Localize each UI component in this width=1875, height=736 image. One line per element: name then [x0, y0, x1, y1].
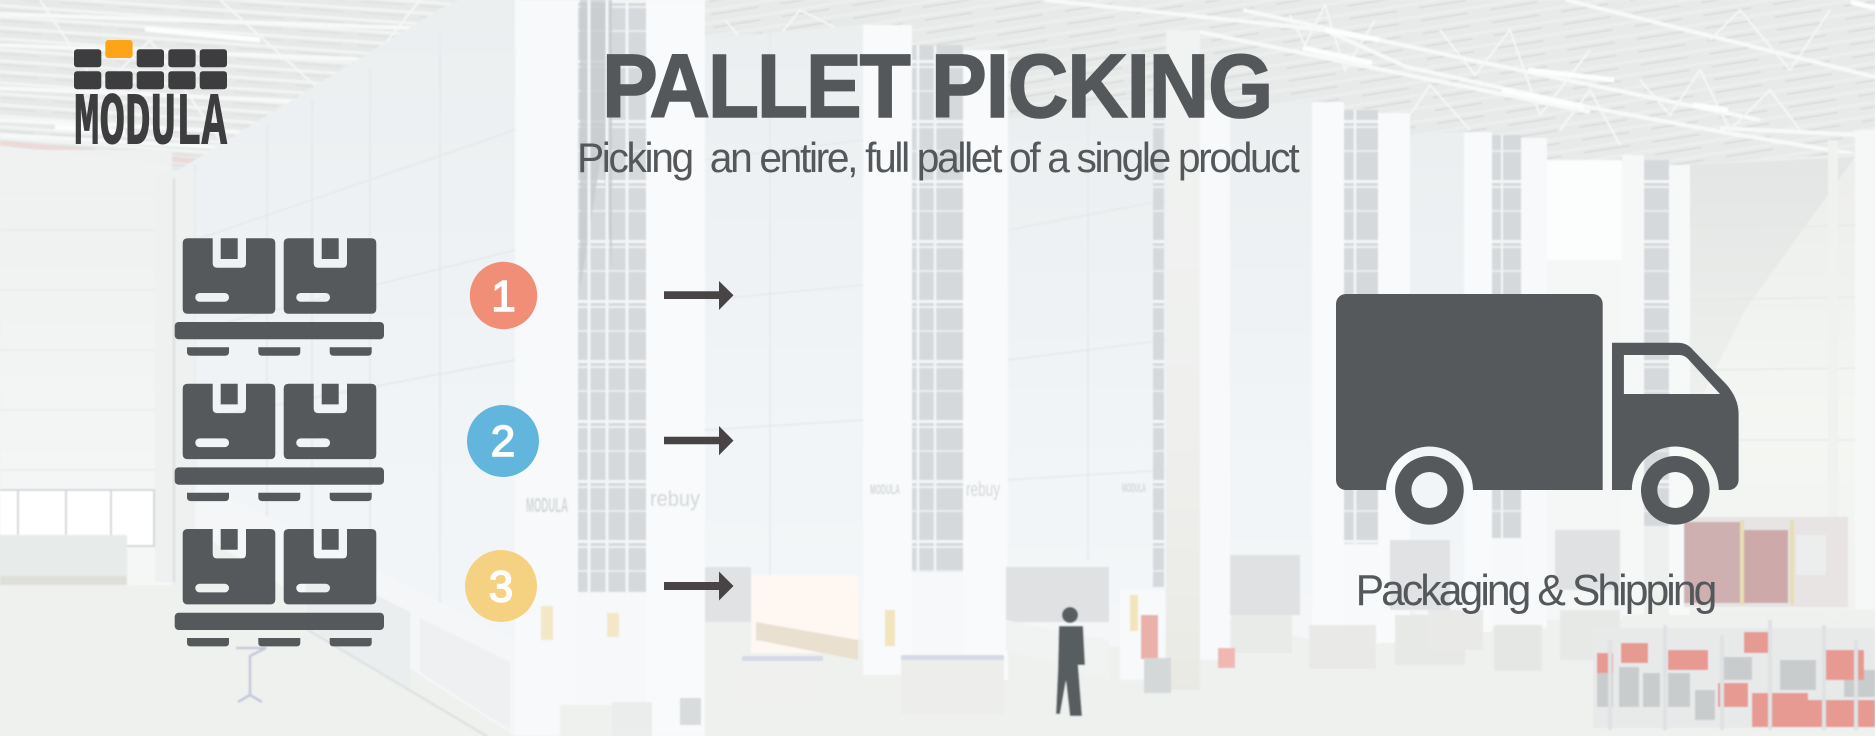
concrete column [1166, 30, 1200, 690]
step badge 3: 3 [489, 562, 513, 612]
pallet feet [187, 493, 372, 501]
step badge 3 [465, 550, 537, 622]
arrow 1 [664, 281, 734, 310]
ceiling trusses [0, 0, 1875, 170]
right wall [1690, 153, 1855, 610]
step badge 2: 2 [491, 417, 515, 466]
logo: Modula [74, 40, 227, 166]
subtitle: Picking an entire, full pallet of a single product [577, 134, 1300, 181]
arrow 2 [664, 426, 734, 455]
step badge 2 [467, 405, 539, 477]
person [1056, 607, 1085, 716]
icon: pallet 2 [175, 384, 384, 501]
small marks on towers: MODULA [870, 481, 900, 497]
box left [183, 384, 275, 459]
small marks on towers: MODULA [526, 495, 568, 517]
machine openings [705, 567, 751, 622]
tower 1 front [515, 0, 578, 736]
pallet feet [187, 347, 372, 356]
ceiling hatching [0, 0, 1875, 180]
box right [284, 238, 376, 314]
floor [0, 585, 1875, 736]
label: packaging and shipping: Packaging & Shipping [1356, 566, 1717, 615]
pallet deck [175, 613, 384, 630]
step badge 1: 1 [491, 272, 516, 321]
step badge 1 [470, 262, 537, 329]
background: washed-out warehouse photo: MODULA [1122, 481, 1146, 495]
pallet deck [175, 322, 384, 339]
pallet deck [175, 467, 384, 485]
red racks [1684, 517, 1848, 607]
stacked goods at left [0, 535, 127, 579]
warning labels [541, 606, 553, 640]
box left [183, 238, 275, 314]
front wheel [1395, 456, 1464, 525]
tower 2 [705, 25, 863, 640]
icon: delivery truck [1336, 294, 1739, 525]
tower 5 [1410, 132, 1464, 640]
box right [284, 529, 376, 604]
left wall [0, 150, 172, 590]
small marks on towers: rebuy [966, 479, 1000, 501]
tower 1 side [172, 0, 578, 736]
red pipe line [0, 143, 213, 163]
tower 6 [1547, 160, 1622, 260]
truck cargo box [1336, 294, 1603, 490]
red/grey trolleys bottom right [1593, 620, 1875, 730]
left windows [0, 489, 155, 547]
fire boxes and bins [1141, 615, 1158, 659]
stand [236, 648, 266, 702]
pallet feet [187, 638, 372, 646]
carts [742, 660, 823, 707]
tower 4 [1230, 102, 1312, 640]
box left [183, 529, 275, 604]
logo: Modula: MODULA [74, 82, 227, 166]
icon: pallet 1 [175, 238, 384, 356]
icon: pallet 3 [175, 529, 384, 646]
rear wheel [1641, 456, 1710, 525]
small marks on towers: rebuy [650, 486, 700, 511]
title: PALLET [602, 36, 911, 137]
small marks on towers [526, 479, 1146, 517]
tower 3 [1008, 100, 1166, 650]
title [602, 36, 1273, 137]
truck cab [1612, 343, 1739, 490]
title: PICKING [931, 36, 1273, 137]
box right [284, 384, 376, 459]
arrow 3 [664, 572, 734, 600]
